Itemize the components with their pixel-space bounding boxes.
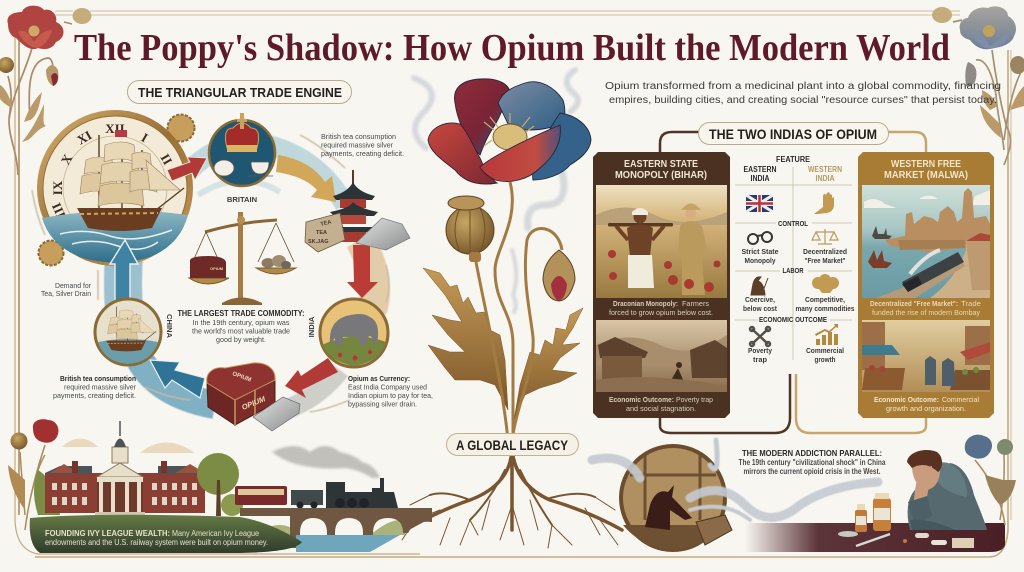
poppy group bottom right — [965, 435, 1016, 525]
icon: Britain medallion — [209, 113, 275, 186]
note: British tea consumption lower: British tea consumption — [60, 374, 136, 383]
icon: growth chart — [815, 324, 838, 345]
text: control values: "Free Market" — [804, 256, 846, 265]
clock numerals: XI — [74, 127, 94, 148]
panel: triangular trade engine — [32, 80, 433, 431]
image: Bombay harbour — [862, 185, 990, 298]
panel: two Indias of opium — [593, 122, 994, 433]
text: outcome values — [748, 346, 844, 364]
text: modern addiction parallel: THE MODERN ADDICTION PARALLEL: — [742, 448, 882, 458]
intro text: Opium transformed from a medicinal plant into a global commodity, financing — [605, 81, 1001, 92]
text: modern addiction parallel — [738, 448, 886, 476]
note: demand for tea: Tea, Silver Drain — [41, 289, 91, 298]
label: China: CHINA — [165, 314, 174, 339]
poppy bloom — [428, 79, 591, 184]
caption: economic outcome west: Economic Outcome: — [874, 395, 939, 404]
arrow: China port to clock — [110, 240, 138, 302]
caption: draconian monopoly: forced to grow opium below cost. — [609, 308, 713, 317]
icon: pagoda with tea and silver — [305, 170, 410, 252]
header row: FEATURE — [776, 155, 811, 164]
text: outcome values: Poverty — [748, 346, 773, 355]
icon: laborer — [751, 277, 768, 295]
panel: modern addiction parallel — [592, 435, 1016, 552]
text: control values: Monopoly — [744, 256, 776, 265]
distant hills — [262, 520, 405, 535]
panel: Ivy League wealth scene — [8, 419, 432, 553]
caption: decentralized free market: funded the rise of modern Bombay — [872, 308, 980, 317]
icon: pagoda with tea and silver: TEA — [316, 230, 327, 236]
caption: economic outcome west — [874, 395, 979, 413]
text: labor values: Competitive, — [805, 295, 845, 304]
caption: economic outcome east: Economic Outcome: — [609, 395, 674, 404]
arrow: Britain to China — [276, 155, 336, 202]
note: British tea consumption upper: required massive silver — [321, 140, 394, 150]
tree — [197, 453, 243, 516]
icon: balance scales with opium: OPIUM — [210, 266, 224, 271]
row label: economic outcome: ECONOMIC OUTCOME — [759, 315, 827, 324]
panel heading east: EASTERN STATE — [624, 158, 698, 170]
caption: economic outcome west: Commercial — [942, 395, 979, 404]
header row: INDIA — [750, 174, 770, 183]
panel heading east — [615, 158, 707, 181]
drifting smoke — [592, 440, 878, 520]
note: British tea consumption lower: required massive silver — [64, 382, 137, 392]
row label: control: CONTROL — [778, 219, 808, 228]
icon: handcuffs — [748, 232, 772, 244]
river — [296, 535, 400, 552]
connector lines — [660, 132, 926, 433]
leaf left — [423, 268, 508, 410]
comparison table — [735, 155, 854, 364]
text: control values: Decentralized — [803, 247, 847, 256]
caption: economic outcome west: growth and organization. — [886, 404, 966, 413]
icon: China ship medallion — [95, 299, 161, 365]
panel heading west: MARKET (MALWA) — [884, 169, 968, 181]
icon: small scales — [812, 229, 838, 244]
arrow: chest to China port — [150, 360, 205, 398]
tree behind — [34, 470, 60, 515]
text: largest trade commodity: In the 19th century, opium was — [192, 318, 290, 327]
text: labor values: below cost — [743, 304, 777, 313]
note: demand for tea — [41, 281, 91, 298]
clock numerals: VIII — [48, 200, 72, 229]
steam train — [235, 478, 398, 508]
icon: pagoda with tea and silver: SK.JAG — [308, 239, 328, 245]
note: opium as currency: Indian opium to pay for tea, — [348, 391, 433, 400]
caption: draconian monopoly: Draconian Monopoly: — [613, 299, 678, 308]
icon: opium chest: OPIUM — [240, 394, 267, 412]
poppy group bottom left — [8, 419, 59, 530]
intro text: empires, building cities, and creating social "resource curses" that persist today. — [609, 95, 997, 106]
smoke wisps around poppy — [414, 70, 578, 312]
clock numerals: I — [139, 130, 151, 145]
text: outcome values: growth — [814, 355, 836, 364]
caption: Ivy League wealth: endowments and the U.S. railway system were built on opium money. — [45, 538, 268, 547]
icon: pagoda with tea and silver: TEA — [320, 219, 332, 228]
panel heading west: WESTERN FREE — [891, 158, 961, 170]
roots — [402, 450, 622, 548]
text: control values: Strict State — [742, 247, 778, 256]
caption: economic outcome east — [609, 395, 713, 413]
leaf right — [514, 308, 583, 420]
note: opium as currency — [348, 374, 433, 408]
icon: hands — [812, 274, 839, 293]
text: labor values: many commodities — [796, 304, 854, 313]
icon: ship clock — [37, 110, 193, 266]
clock numerals: XII — [105, 121, 125, 136]
icon: opium chest: OPIUM — [231, 371, 252, 384]
header row: WESTERN — [808, 165, 842, 174]
row label: labor: LABOR — [782, 266, 804, 275]
image: bazaar — [862, 320, 990, 392]
note: British tea consumption lower — [53, 374, 137, 400]
pill bottles and syringe — [838, 493, 974, 548]
text: labor values: Coercive, — [745, 295, 775, 304]
icon: British flag — [746, 195, 773, 212]
seed pod — [446, 196, 494, 262]
image: poor village — [596, 320, 727, 392]
clock numerals: X — [58, 151, 76, 167]
caption: Ivy League wealth: Many American Ivy League — [172, 529, 259, 538]
stone bridge — [240, 508, 432, 550]
panel heading west — [884, 158, 968, 181]
soft clouds — [62, 438, 195, 453]
green ribbon — [30, 515, 302, 553]
note: British tea consumption upper: payments, creating deficit. — [321, 149, 404, 158]
label: India: INDIA — [307, 316, 316, 337]
note: opium as currency: bypassing silver drain. — [348, 400, 417, 408]
note: British tea consumption upper: British tea consumption — [321, 132, 396, 141]
steam smoke — [272, 446, 380, 478]
caption: economic outcome east: and social stagnation. — [626, 404, 696, 413]
text: outcome values: Commercial — [806, 346, 844, 355]
caption: draconian monopoly — [609, 299, 713, 317]
text: control values — [742, 247, 847, 265]
arrow: India to chest — [285, 358, 338, 398]
caption: Ivy League wealth — [45, 528, 268, 547]
arrow: China to India — [347, 245, 378, 298]
clock numerals — [48, 121, 176, 229]
note: opium as currency: East India Company used — [348, 382, 427, 392]
caption: decentralized free market: Trade — [961, 299, 981, 308]
text: largest trade commodity — [178, 309, 304, 344]
corner botanical: top right poppy — [932, 6, 1024, 165]
brick building — [45, 421, 205, 517]
caption: draconian monopoly: Farmers — [682, 299, 709, 308]
legacy label: A GLOBAL LEGACY — [456, 438, 568, 453]
icon: India elephant medallion — [320, 299, 388, 367]
clock numerals: II — [158, 151, 176, 167]
panel: eastern state monopoly — [593, 152, 730, 418]
clock numerals: IX — [50, 180, 65, 195]
title: The Poppy's Shadow: How Opium Built the Modern World — [74, 27, 950, 69]
text: modern addiction parallel: mirrors the current opioid crisis in the West. — [744, 467, 880, 476]
caption: economic outcome east: Poverty trap — [676, 395, 713, 404]
intro text — [605, 81, 1001, 106]
heading: triangular trade engine — [128, 80, 352, 104]
text: labor values — [743, 295, 854, 313]
image: farmer and soldier — [596, 185, 727, 298]
trade ribbons — [32, 135, 389, 412]
corner botanical: top left poppy — [0, 6, 92, 175]
caption: decentralized free market: Decentralized "Free Market": — [870, 299, 958, 308]
icon: gears — [38, 114, 194, 266]
heading: two Indias — [698, 122, 888, 144]
header row: EASTERN — [744, 165, 777, 174]
table — [745, 523, 1005, 552]
note: demand for tea: Demand for — [55, 281, 91, 290]
opium den medallion — [621, 446, 732, 550]
arrow: ship to Britain — [167, 157, 207, 181]
central poppy plant — [402, 79, 622, 548]
icon: opium chest — [207, 363, 300, 431]
panel heading east: MONOPOLY (BIHAR) — [615, 169, 707, 181]
heading: triangular trade engine: THE TRIANGULAR TRADE ENGINE — [138, 85, 342, 100]
note: British tea consumption lower: payments, creating deficit. — [53, 391, 136, 400]
text: largest trade commodity: the world's most valuable trade — [192, 326, 290, 336]
text: largest trade commodity: THE LARGEST TRADE COMMODITY: — [178, 309, 304, 318]
note: British tea consumption upper — [321, 132, 404, 158]
icon: open hand — [814, 192, 834, 214]
heading: two Indias: THE TWO INDIAS OF OPIUM — [709, 126, 877, 142]
header row: INDIA — [816, 174, 835, 183]
icon: broken chain — [750, 327, 770, 346]
stems — [476, 182, 562, 440]
text: outcome values: trap — [753, 355, 767, 364]
legacy label — [446, 434, 578, 456]
header row — [744, 155, 842, 183]
icon: balance scales with opium — [189, 212, 296, 305]
caption: decentralized free market — [870, 299, 981, 317]
text: largest trade commodity: good by weight. — [216, 335, 266, 344]
note: opium as currency: Opium as Currency: — [348, 374, 410, 383]
man with head in hand — [907, 450, 987, 530]
flower bud — [543, 250, 575, 301]
caption: Ivy League wealth: FOUNDING IVY LEAGUE WEALTH: — [45, 528, 170, 538]
text: modern addiction parallel: The 19th century "civilizational shock" in China — [738, 458, 886, 467]
panel: western free market — [858, 152, 994, 418]
label: Britain: BRITAIN — [227, 195, 257, 204]
